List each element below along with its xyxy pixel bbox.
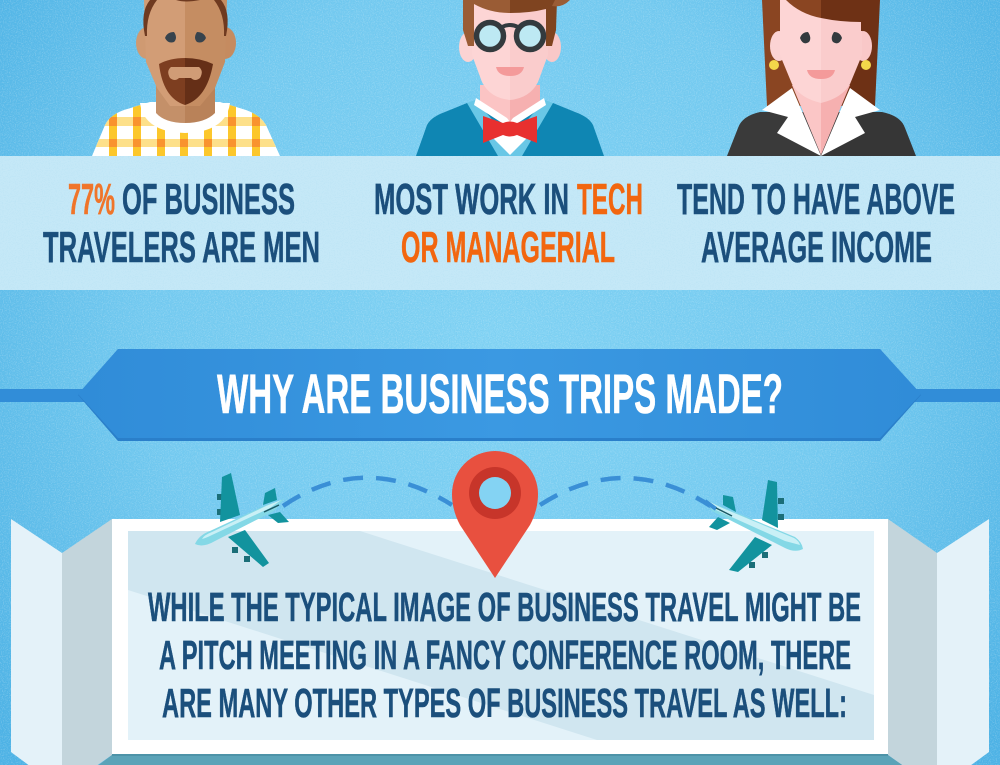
text: share of men: TRAVELERS ARE MEN — [43, 223, 320, 272]
illustration: businesswoman — [727, 0, 916, 156]
illustration: bearded man in plaid shirt — [90, 0, 282, 156]
dashed flight path right — [540, 478, 712, 507]
folded paper panel — [11, 519, 989, 765]
text: occupations: OR MANAGERIAL — [401, 223, 615, 272]
dashed flight path left — [283, 478, 452, 506]
icon: map pin — [452, 451, 538, 578]
text: share of men: OF BUSINESS — [122, 175, 295, 224]
illustration: man with glasses and bow tie — [416, 0, 604, 156]
icon: airplane right — [705, 480, 803, 572]
text: income — [677, 175, 955, 272]
text: share of men: 77% — [68, 175, 115, 224]
paragraph — [148, 584, 861, 726]
panel: traveler facts band — [0, 156, 1000, 290]
text: occupations: MOST WORK IN — [374, 175, 569, 224]
section banner — [0, 349, 1000, 441]
text: share of men — [43, 175, 320, 272]
text: occupations: TECH — [577, 175, 643, 224]
text: occupations — [374, 175, 643, 272]
icon: airplane left — [195, 473, 289, 567]
